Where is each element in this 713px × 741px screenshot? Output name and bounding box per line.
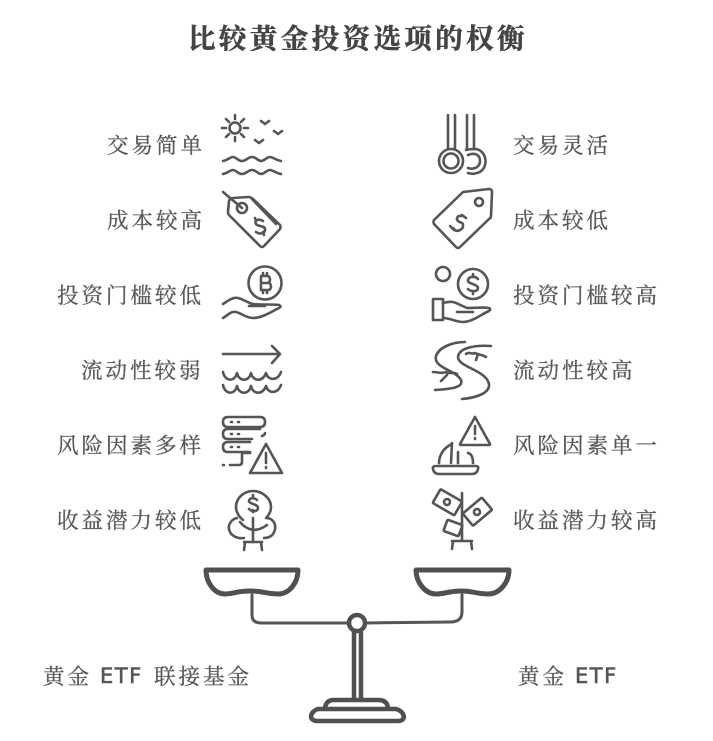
icon: sun, birds and waves [222, 115, 282, 174]
icon: hand with bitcoin [223, 266, 282, 318]
left pan [206, 570, 298, 594]
label: 交易简单: 交易简单 [107, 129, 205, 160]
label: 成本较高: 成本较高 [107, 204, 205, 235]
icon: gymnastic rings [439, 115, 486, 174]
base [311, 700, 404, 721]
label: 成本较低: 成本较低 [513, 204, 611, 235]
label: 收益潜力较低: 收益潜力较低 [57, 504, 204, 535]
title: 比较黄金投资选项的权衡 [188, 16, 528, 56]
label: 流动性较高: 流动性较高 [513, 354, 636, 385]
icon: winding river [433, 342, 491, 399]
icon: arrow over water [223, 346, 281, 393]
label: 黄金 ETF 联接基金: 黄金 [43, 660, 92, 691]
icon: boat with warning [433, 417, 490, 474]
icon: price tag left [223, 192, 280, 247]
label: 投资门槛较高: 投资门槛较高 [513, 279, 660, 310]
icon: money tree [229, 491, 275, 550]
balance scale [206, 570, 509, 721]
label: 风险因素多样: 风险因素多样 [57, 429, 204, 460]
label: 黄金 ETF 联接基金: ETF [100, 664, 143, 688]
icon: server stack with warning [223, 417, 282, 473]
icon: price tag right [434, 189, 492, 248]
column [354, 633, 361, 699]
label: 黄金 ETF: 黄金 [518, 660, 567, 691]
label: 投资门槛较低: 投资门槛较低 [57, 279, 204, 310]
label: 流动性较弱: 流动性较弱 [81, 354, 204, 385]
icon: money plant [433, 489, 492, 549]
icon: hand with dollar coin [433, 267, 490, 322]
label: 收益潜力较高: 收益潜力较高 [513, 504, 660, 535]
label: 交易灵活: 交易灵活 [513, 129, 611, 160]
label: 风险因素单一: 风险因素单一 [513, 429, 660, 460]
label: 黄金 ETF 联接基金: 联接基金 [154, 660, 252, 691]
scale beam [252, 595, 462, 623]
right pan [416, 570, 509, 594]
label: 黄金 ETF: ETF [575, 664, 618, 688]
pivot [349, 615, 365, 631]
